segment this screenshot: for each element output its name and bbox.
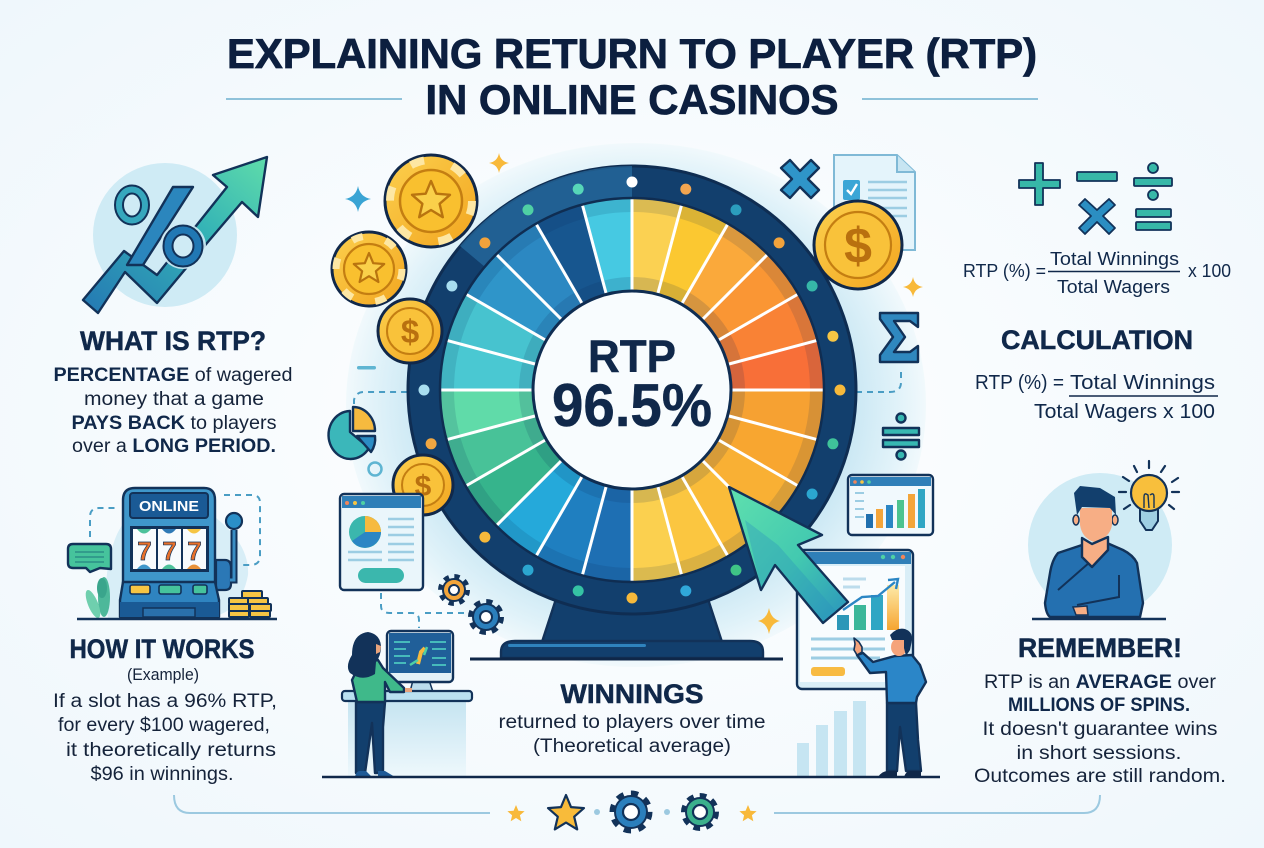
man torso: [1045, 543, 1143, 617]
icon: slot machine: [68, 488, 277, 620]
dashboard window right: [848, 475, 933, 535]
sparkle: yellow lower: [758, 608, 780, 634]
icon: divide sign: [883, 414, 919, 460]
text: how it works: for every $100 wagered,: [58, 715, 270, 736]
section: remember: [974, 461, 1226, 787]
coin stacks: [229, 591, 271, 617]
text: how it works: it theoretically returns: [66, 740, 276, 761]
coin: dollar right: $: [844, 218, 872, 274]
section: how it works: [53, 488, 277, 785]
heading: calculation: CALCULATION: [1001, 325, 1193, 355]
formula: calculation: RTP (%) =: [975, 372, 1064, 394]
text: what is RTP: PERCENTAGE of wagered: [54, 365, 292, 386]
section: calculation: [963, 163, 1231, 423]
star small right: [739, 805, 757, 821]
text: what is RTP: money that a game: [84, 389, 264, 410]
speech bubble: [68, 544, 111, 572]
text: what is RTP: PAYS BACK to players: [72, 413, 276, 434]
sparkle: blue: [345, 186, 371, 212]
gear blue footer: [613, 794, 649, 830]
gear: orange: [441, 577, 467, 603]
segment dividers: [440, 198, 824, 582]
text: remember: Outcomes are still random.: [974, 766, 1226, 787]
gear: blue: [471, 602, 501, 632]
text: remember: RTP is an AVERAGE over: [984, 672, 1217, 693]
coin: star chip small: [332, 232, 406, 306]
center hub: RTP: [588, 331, 676, 382]
center hub: 96.5%: [552, 372, 712, 439]
text: remember: [974, 672, 1226, 787]
icon: multiply sign: [781, 160, 819, 198]
large chart window: [797, 550, 913, 689]
formula: calculation: Total Wagers x 100: [1034, 401, 1215, 423]
section: winnings caption: returned to players over time: [498, 712, 766, 733]
icon: small pie chart: [329, 407, 375, 459]
icon: slot machine: 7: [137, 536, 152, 566]
ground line: [322, 776, 940, 778]
star large: [548, 795, 584, 829]
icon: math symbols: [1019, 163, 1172, 234]
gears: [441, 577, 501, 632]
icon: slot machine: 7: [162, 536, 177, 566]
icon: thinking person with lightbulb: [1028, 461, 1179, 619]
section: winnings caption: [498, 679, 766, 757]
background halo behind wheel: [346, 143, 926, 667]
document icon: [834, 155, 915, 250]
dashed connector lines: [354, 368, 901, 628]
coin: dollar left upper: [378, 299, 442, 363]
text: how it works: [53, 665, 277, 785]
coin: dollar left lower: [393, 455, 453, 515]
man head: [1073, 515, 1079, 525]
sparkle: yellow right: [903, 277, 923, 297]
footer ornament: [174, 794, 1100, 830]
roulette wheel: [408, 166, 856, 614]
title: IN ONLINE CASINOS: [426, 76, 838, 123]
icon: small minus: [357, 366, 376, 370]
heading: remember: REMEMBER!: [1018, 633, 1182, 663]
text: how it works: If a slot has a 96% RTP,: [53, 691, 277, 712]
wheel rim: [408, 166, 856, 614]
icon: percent with rising arrow: [83, 157, 267, 313]
icon: slot machine: ONLINE: [139, 499, 199, 515]
formula: calculation: Total Winnings: [1070, 372, 1215, 394]
desk with monitor: [342, 631, 472, 777]
formula: fraction: [963, 249, 1231, 297]
title: EXPLAINING RETURN TO PLAYER (RTP): [227, 30, 1037, 77]
wheel stand: [470, 596, 783, 659]
plant: [83, 577, 110, 620]
star small left: [507, 805, 525, 821]
text: how it works: $96 in winnings.: [90, 764, 234, 785]
cursor arrow: [729, 487, 848, 623]
dashboard window left: [340, 494, 423, 590]
light bulb: [1119, 461, 1179, 530]
person: woman at desk: [348, 632, 412, 777]
pale bars: [797, 701, 866, 777]
icon: ring: [368, 462, 382, 476]
formula: fraction: Total Winnings: [1050, 249, 1179, 269]
section: winnings caption: WINNINGS: [560, 679, 704, 709]
coin: dollar right: [814, 201, 902, 289]
heading: how it works: HOW IT WORKS: [70, 634, 254, 664]
section: winnings caption: (Theoretical average): [533, 736, 731, 757]
icon: slot machine: 7: [187, 536, 202, 566]
center hub: [533, 291, 731, 489]
formula: calculation: [975, 372, 1218, 423]
lever: [216, 513, 242, 590]
monitor: [387, 631, 453, 692]
section: what is RTP: [54, 157, 292, 457]
coin: star chip large: [385, 155, 477, 247]
icon: sigma: [880, 313, 918, 362]
text: what is RTP: [54, 365, 292, 457]
rim studs: [418, 176, 846, 604]
heading: what is RTP: WHAT IS RTP?: [80, 326, 266, 356]
formula: fraction: x 100: [1188, 261, 1231, 281]
text: remember: in short sessions.: [1016, 743, 1182, 764]
gear green footer: [684, 796, 716, 828]
person: man pointing: [854, 629, 926, 777]
coin: dollar left upper: $: [401, 313, 419, 350]
text: remember: MILLIONS OF SPINS.: [1008, 695, 1190, 716]
title: [226, 30, 1038, 123]
wheel segments: [434, 192, 830, 588]
text: remember: It doesn't guarantee wins: [982, 719, 1218, 740]
coin: dollar left lower: $: [415, 470, 432, 503]
sparkle: yellow top: [489, 153, 509, 173]
text: what is RTP: over a LONG PERIOD.: [72, 436, 276, 457]
text: how it works: (Example): [127, 665, 199, 684]
formula: fraction: RTP (%) =: [963, 261, 1046, 281]
formula: fraction: Total Wagers: [1057, 277, 1170, 297]
